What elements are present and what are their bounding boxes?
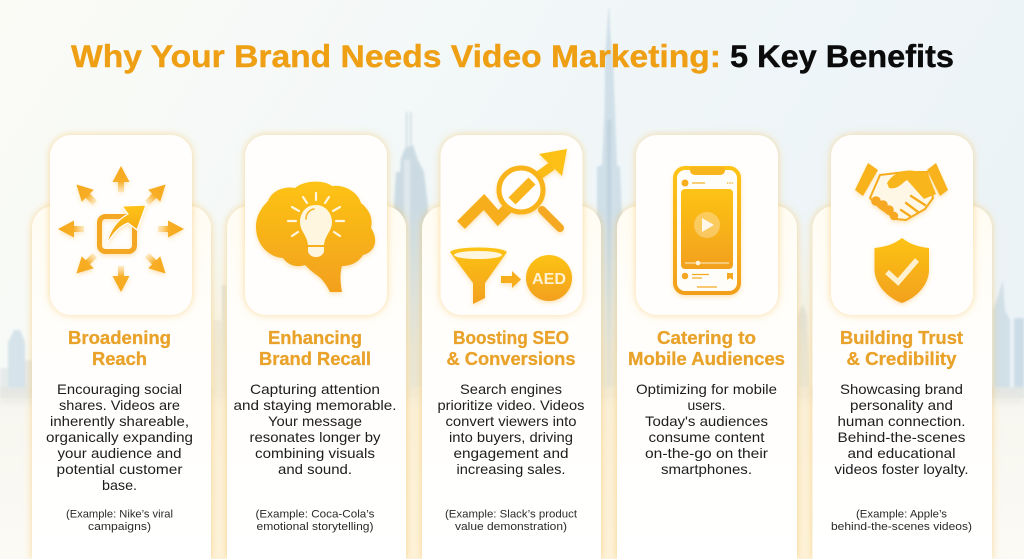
heading: Broadening [68,328,171,348]
body text: and staying memorable. [234,397,396,413]
body text: Today's audiences [645,413,768,429]
body text: Behind-the-scenes [838,429,966,445]
horizon band [0,387,1024,400]
body text: human connection. [838,413,966,429]
icon: smartphone with video player [675,167,739,293]
body text: organically expanding [46,429,193,445]
heading [840,328,963,369]
icon: brain with light bulb [256,182,375,292]
body text: resonates longer by [250,429,380,445]
heading: Mobile Audiences [628,349,785,369]
example: (Example: Coca-Cola’s [256,508,375,520]
heading: & Credibility [846,349,956,369]
heading: Boosting SEO [453,328,569,348]
body text [234,381,396,477]
body text: your audience and [58,445,182,461]
heading [628,328,785,369]
icon: handshake [855,163,948,220]
body text: base. [102,477,137,493]
body text: personality and [850,397,953,413]
body text: users. [688,397,726,413]
heading [68,328,171,369]
example: emotional storytelling) [256,521,374,533]
panel: building trust and credibility [812,135,992,559]
panel: boosting seo and conversions [422,135,601,559]
heading: Enhancing [268,328,362,348]
tower between cards 4 and 5 [798,304,810,400]
panel: broadening reach [32,135,211,559]
example: value demonstration) [455,521,567,533]
far left tower [8,330,25,390]
title: Why Your Brand Needs Video Marketing: [71,38,721,74]
icon: funnel to AED coin [450,248,572,304]
background: city skyline [0,8,1024,400]
heading [259,328,371,369]
example [831,508,972,533]
heading: Building Trust [840,328,963,348]
body text [438,381,584,477]
body text: videos foster loyalty. [834,461,968,477]
heading: Catering to [657,328,756,348]
tower between cards 1 and 2 [222,285,226,400]
heading [446,328,576,369]
Burj tower [597,8,622,400]
body text: Encouraging social [57,381,182,397]
body text: and sound. [278,461,352,477]
body text [46,381,193,493]
panel: catering to mobile audiences [617,135,797,559]
example [256,508,375,533]
body text: Showcasing brand [840,381,963,397]
example: behind-the-scenes videos) [831,521,972,533]
body text: shares. Videos are [59,397,180,413]
right towers [993,280,1010,400]
icon: shield with check [874,238,929,303]
body text: inherently shareable, [50,413,189,429]
body text: Search engines [460,381,562,397]
body text: into buyers, driving [449,429,573,445]
body text: potential customer [56,461,183,477]
title [71,38,954,74]
body text: increasing sales. [456,461,566,477]
icon: share arrow radiating outward [58,166,184,292]
body text: combining visuals [255,445,375,461]
panel: enhancing brand recall [227,135,406,559]
body text [834,381,968,477]
body text: Optimizing for mobile [636,381,777,397]
body text: Capturing attention [250,381,380,397]
example: (Example: Nike’s viral [66,508,173,520]
example [445,508,577,533]
icon: funnel to AED coin: AED [532,271,566,288]
example: (Example: Apple’s [856,508,948,520]
tower with twin antennas [406,112,412,152]
body text: convert viewers into [446,413,577,429]
body text: and educational [848,445,956,461]
body text: prioritize video. Videos [438,397,584,413]
example [66,508,173,533]
body text [636,381,777,477]
example: (Example: Slack’s product [445,508,577,520]
body text: on-the-go on their [645,445,768,461]
body text: smartphones. [661,461,752,477]
title: 5 Key Benefits [730,38,954,74]
body text: engagement and [454,445,568,461]
heading: Reach [92,349,147,369]
icon: rising chart with magnifier [461,149,567,228]
body text: Your message [268,413,362,429]
body text: consume content [648,429,765,445]
heading: Brand Recall [259,349,371,369]
heading: & Conversions [446,349,576,369]
example: campaigns) [88,521,151,533]
